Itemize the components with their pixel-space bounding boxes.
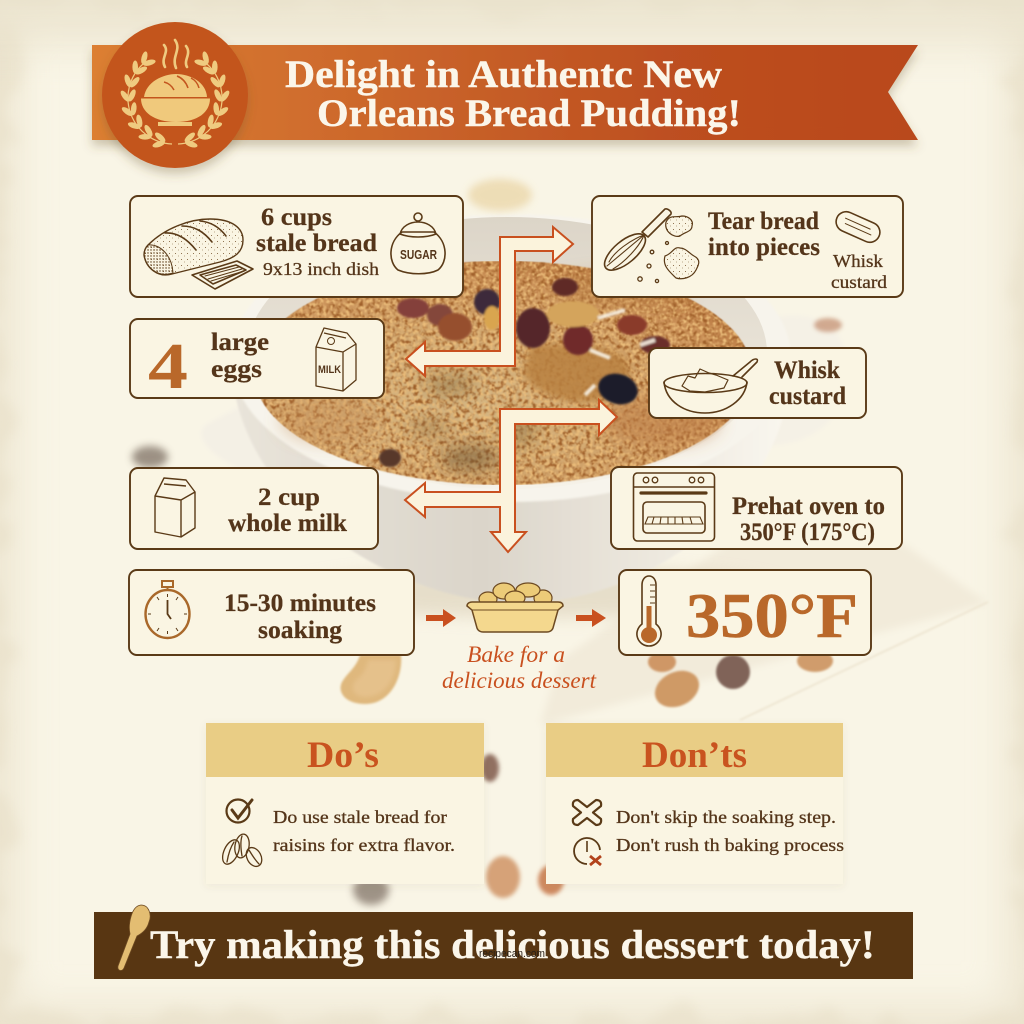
icon: baking dish	[192, 261, 253, 289]
icon: stopwatch	[146, 581, 190, 638]
arrow: lower triple arrow	[405, 400, 617, 552]
icon: bread stick	[833, 209, 883, 245]
don'ts text: Don't skip the soaking step.	[616, 807, 836, 827]
step text: Tear bread	[708, 208, 819, 235]
do's text: Do use stale bread for	[273, 807, 447, 827]
arrow: upper double arrow	[406, 227, 573, 376]
handwritten caption: Bake for a	[467, 642, 565, 667]
title text: Orleans Bread Pudding!	[317, 92, 741, 135]
big temperature: 350°F	[686, 581, 858, 651]
step text	[769, 357, 846, 410]
ingredient text	[211, 329, 269, 383]
panel: 15-30 minutes soaking	[129, 570, 414, 655]
icon: carton	[155, 478, 195, 537]
icon: oven	[634, 473, 714, 541]
icon: sugar jar: SUGAR	[400, 248, 437, 262]
ingredient text	[256, 204, 379, 279]
do's heading: Do’s	[307, 735, 379, 776]
ingredient text: 6 cups	[261, 204, 332, 231]
panel: 350°F temperature	[619, 570, 871, 655]
step text: 350°F (175°C)	[740, 519, 875, 546]
step text	[708, 208, 820, 261]
icon: sugar jar	[391, 213, 445, 274]
timing text: soaking	[258, 617, 343, 644]
icon: wooden spoon	[118, 905, 150, 970]
don'ts heading: Don’ts	[642, 735, 747, 776]
panel: 2 cup whole milk	[130, 468, 378, 549]
icon: thermometer	[637, 576, 661, 646]
step text: custard	[769, 383, 846, 410]
ingredient text: 9x13 inch dish	[263, 259, 379, 279]
banner ribbon	[92, 45, 918, 140]
arrow: soaking to pan	[426, 609, 456, 627]
panel: tear bread into pieces	[592, 196, 903, 297]
icon: baking pan with bread	[467, 583, 563, 632]
ingredient text: 2 cup	[258, 484, 320, 511]
panel: don'ts	[546, 723, 844, 884]
icon: clock with x	[574, 838, 601, 865]
handwritten caption	[442, 642, 597, 693]
icon: loaf of bread	[144, 219, 243, 275]
ingredient text: stale bread	[256, 230, 377, 257]
secondary step text: Whisk	[833, 251, 883, 271]
icon: almonds	[219, 833, 265, 869]
title text	[285, 53, 741, 135]
icon: milk carton	[316, 328, 356, 391]
call to action text: Try making this delicious dessert today!	[150, 922, 875, 967]
handwritten caption: delicious dessert	[442, 668, 597, 693]
step text: Prehat oven to	[732, 493, 885, 520]
panel: 6 cups stale bread	[130, 196, 463, 297]
do's text: raisins for extra flavor.	[273, 835, 455, 855]
ingredient text: large	[211, 329, 269, 356]
icon: cross	[573, 800, 601, 825]
timing text: 15-30 minutes	[224, 590, 376, 617]
panel: do's	[206, 723, 484, 884]
ingredient text: eggs	[211, 356, 262, 383]
do's text	[273, 807, 455, 855]
ingredient text	[228, 484, 347, 537]
step text: into pieces	[708, 234, 820, 261]
step text	[732, 493, 885, 546]
watermark: recipecan.com	[479, 948, 545, 960]
don'ts text	[616, 807, 844, 855]
ingredient text: whole milk	[228, 510, 347, 537]
panel: whisk custard	[649, 348, 866, 418]
big number 4: 4	[148, 330, 188, 403]
title text: Delight in Authentc New	[285, 53, 722, 96]
emblem: bread bowl in wreath	[102, 22, 248, 168]
timing text	[224, 590, 376, 644]
panel: preheat oven	[611, 467, 902, 549]
panel: 4 large eggs	[130, 319, 384, 403]
icon: whisk and crumbs	[599, 209, 699, 283]
title banner	[92, 45, 918, 140]
icon: check mark	[226, 800, 252, 822]
icon: bowl with spoon	[664, 359, 757, 413]
icon: milk carton: MILK	[318, 364, 341, 376]
arrow: pan to oven temperature	[576, 609, 606, 627]
secondary step text	[831, 251, 887, 292]
don'ts text: Don't rush th baking process	[616, 835, 844, 855]
footer call to action	[94, 905, 913, 979]
secondary step text: custard	[831, 272, 887, 292]
step text: Whisk	[774, 357, 840, 384]
